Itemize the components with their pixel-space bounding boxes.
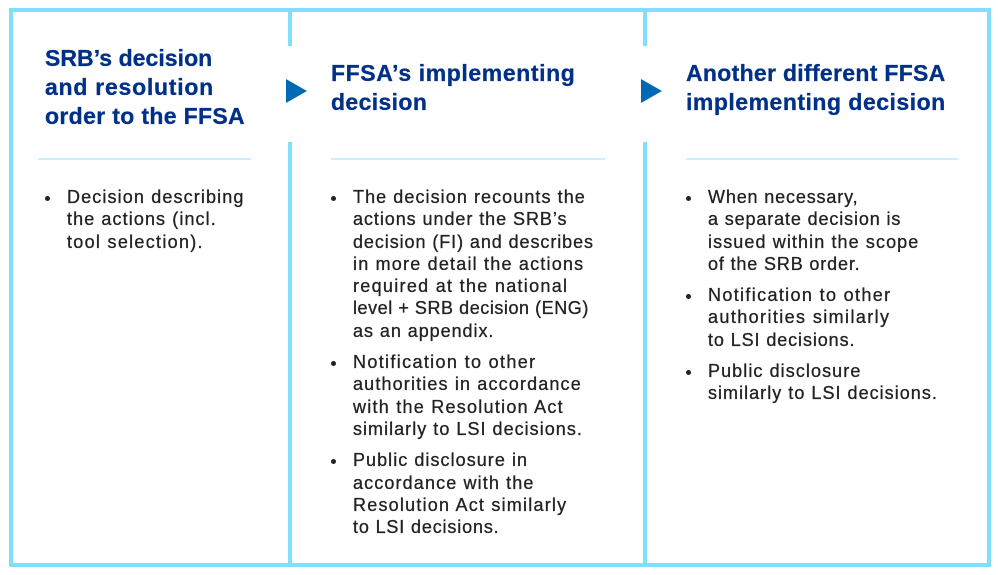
divider: between panels 1 and 2, lower (288, 142, 292, 567)
text: panel 3 bullets: similarly to LSI decisions. (708, 383, 938, 403)
text: panel 3 bullets: issued within the scope (708, 232, 919, 252)
heading: SRB's decision: SRB’s decision (45, 45, 212, 71)
text: panel 2 bullets: Notification to other (353, 352, 536, 372)
heading: FFSA's implementing decision (331, 60, 575, 115)
text: panel 2 bullets: in more detail the actions (353, 254, 584, 274)
divider: between panels 2 and 3, lower (643, 142, 647, 567)
text: panel 2 bullets: to LSI decisions. (353, 517, 500, 537)
text: panel 2 bullets: accordance with the (353, 473, 535, 493)
text: panel 3 bullets (686, 187, 938, 404)
text: panel 2 bullets: actions under the SRB’s (353, 209, 567, 229)
text: panel 2 bullets: Resolution Act similarly (353, 495, 567, 515)
divider rule: panel 3 (686, 158, 958, 160)
text: panel 2 bullets: authorities in accordance (353, 374, 582, 394)
text: panel 2 bullets: similarly to LSI decisions. (353, 419, 583, 439)
text: panel 3 bullets: to LSI decisions. (708, 330, 855, 350)
text: panel 1 bullets (45, 187, 245, 252)
text: panel 1 bullets: Decision describing (67, 187, 245, 207)
heading: SRB's decision: and resolution (45, 74, 214, 100)
arrow: panel 1 to panel 2 (286, 79, 307, 103)
text: panel 3 bullets: of the SRB order. (708, 254, 861, 274)
heading: SRB's decision (45, 45, 245, 129)
text: panel 2 bullets: as an appendix. (353, 321, 494, 341)
text: panel 2 bullets: decision (FI) and describes (353, 232, 594, 252)
text: panel 3 bullets: Public disclosure (708, 361, 861, 381)
text: panel 3 bullets: authorities similarly (708, 307, 890, 327)
text: panel 1 bullets: the actions (incl. (67, 209, 217, 229)
heading: Another different FFSA implementing decision: Another different FFSA (686, 60, 946, 86)
text: panel 2 bullets: Public disclosure in (353, 450, 528, 470)
divider: between panels 2 and 3, upper (643, 8, 647, 46)
divider rule: panel 1 (38, 158, 251, 160)
text: panel 3 bullets: When necessary, (708, 187, 858, 207)
arrow: panel 2 to panel 3 (641, 79, 662, 103)
heading: Another different FFSA implementing decision (686, 60, 946, 116)
text: panel 2 bullets: with the Resolution Act (353, 397, 564, 417)
text: panel 3 bullets: a separate decision is (708, 209, 901, 229)
heading: FFSA's implementing decision: FFSA’s implementing (331, 60, 575, 86)
divider: between panels 1 and 2, upper (288, 8, 292, 46)
divider rule: panel 2 (331, 158, 605, 160)
text: panel 2 bullets: The decision recounts the (353, 187, 586, 207)
text: panel 2 bullets: required at the national (353, 276, 568, 296)
heading: SRB's decision: order to the FFSA (45, 103, 245, 129)
text: panel 2 bullets (331, 187, 594, 537)
text: panel 2 bullets: level + SRB decision (ENG) (353, 298, 589, 318)
heading: FFSA's implementing decision: decision (331, 89, 427, 115)
heading: Another different FFSA implementing decision: implementing decision (686, 89, 946, 115)
text: panel 1 bullets: tool selection). (67, 232, 204, 252)
text: panel 3 bullets: Notification to other (708, 285, 891, 305)
